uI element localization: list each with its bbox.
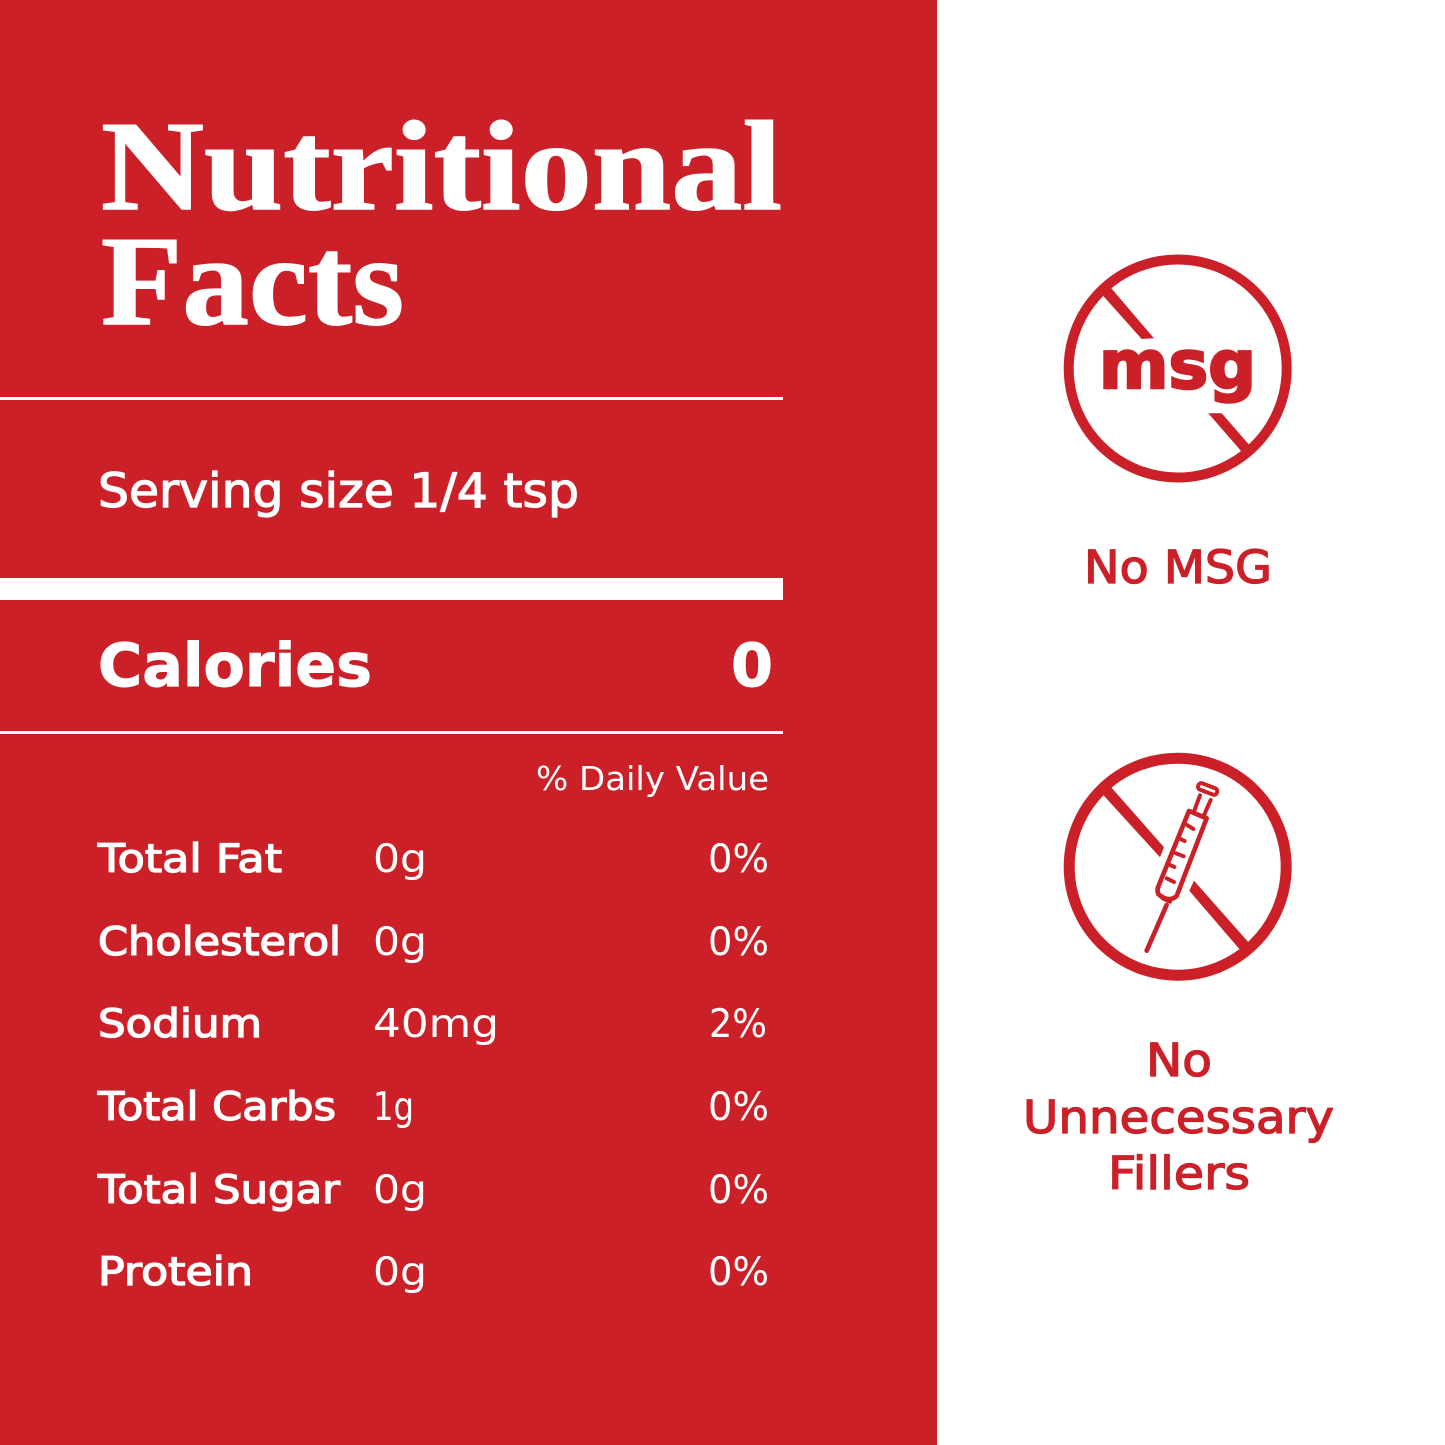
icon: no msg [1069, 260, 1287, 478]
row: total sugar [97, 1168, 769, 1213]
label: no unnecessary fillers: No [1146, 1034, 1212, 1087]
row: total sugar: 0% [708, 1168, 769, 1213]
title: Facts [101, 210, 404, 352]
icon: syringe [1147, 782, 1218, 951]
row: total sugar: 0g [373, 1168, 427, 1213]
calories row: 0 [731, 631, 773, 701]
row: cholesterol: 0g [373, 920, 427, 965]
row: sodium [98, 1002, 767, 1047]
row: total carbs: 0% [708, 1085, 769, 1130]
title [101, 95, 782, 352]
panel: nutritional facts red [0, 0, 937, 1445]
row: total fat: 0% [708, 837, 769, 882]
row: sodium: 40mg [373, 1002, 499, 1047]
title: Nutritional [101, 95, 782, 237]
row: total carbs: 1g [373, 1085, 414, 1130]
row: total fat: 0g [373, 837, 427, 882]
row: protein [98, 1250, 769, 1295]
nutrient table [97, 837, 769, 1295]
row: protein: Protein [98, 1250, 253, 1295]
row: cholesterol [98, 920, 769, 965]
daily value header: % Daily Value [536, 759, 769, 798]
row: total fat: Total Fat [97, 837, 282, 882]
row: total fat [97, 837, 769, 882]
row: total sugar: Total Sugar [97, 1168, 341, 1213]
label: no unnecessary fillers: Fillers [1108, 1147, 1250, 1200]
row: cholesterol: 0% [708, 920, 769, 965]
serving size: Serving size 1/4 tsp [98, 464, 579, 519]
label: no msg: No MSG [1084, 541, 1272, 594]
row: sodium: 2% [709, 1002, 767, 1047]
label: no unnecessary fillers: Unnecessary [1023, 1091, 1334, 1144]
row: total carbs: Total Carbs [97, 1085, 336, 1130]
row: sodium: Sodium [98, 1002, 262, 1047]
icon: no syringe [1069, 758, 1286, 975]
calories row: Calories [98, 631, 372, 701]
row: protein: 0g [373, 1250, 427, 1295]
row: protein: 0% [708, 1250, 769, 1295]
row: total carbs [97, 1085, 769, 1130]
calories row [98, 631, 773, 701]
label: no unnecessary fillers [1023, 1034, 1334, 1200]
icon: no msg: msg [1099, 326, 1256, 404]
row: cholesterol: Cholesterol [98, 920, 341, 965]
